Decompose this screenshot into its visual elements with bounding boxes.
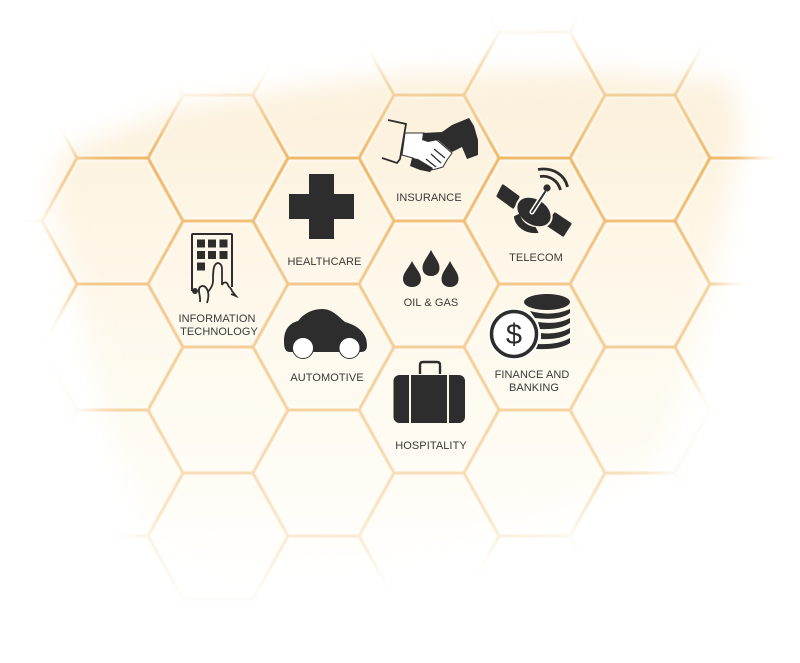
cell: oil and gas (403, 250, 458, 309)
icon: handshake (382, 118, 478, 172)
cell: finance and banking (488, 294, 570, 394)
cell: insurance (382, 118, 478, 204)
icon: medical cross (289, 174, 354, 239)
icon: suitcase (394, 362, 465, 423)
cell: information technology (178, 234, 258, 338)
icon: car (284, 309, 367, 358)
icon: touch keypad (192, 234, 236, 303)
icon: satellite (498, 169, 570, 235)
label: oil and gas: OIL & GAS (404, 297, 458, 309)
cell: telecom (498, 169, 570, 264)
label: information technology: TECHNOLOGY (180, 326, 258, 338)
cell: automotive (284, 309, 367, 384)
label: hospitality: HOSPITALITY (395, 440, 467, 452)
label: insurance: INSURANCE (396, 192, 462, 204)
infographic: industries honeycomb (33, 24, 776, 594)
icon: coin stack: $ (506, 319, 522, 351)
cell: hospitality (394, 362, 467, 452)
label: healthcare: HEALTHCARE (288, 256, 361, 268)
label: information technology: INFORMATION (178, 313, 256, 325)
label: automotive: AUTOMOTIVE (290, 372, 364, 384)
label: finance and banking: FINANCE AND (495, 369, 569, 381)
cell: healthcare (288, 174, 361, 268)
label: finance and banking: BANKING (509, 382, 559, 394)
icon: oil drops (403, 250, 458, 287)
honeycomb background (33, 24, 776, 594)
label: telecom: TELECOM (509, 252, 563, 264)
